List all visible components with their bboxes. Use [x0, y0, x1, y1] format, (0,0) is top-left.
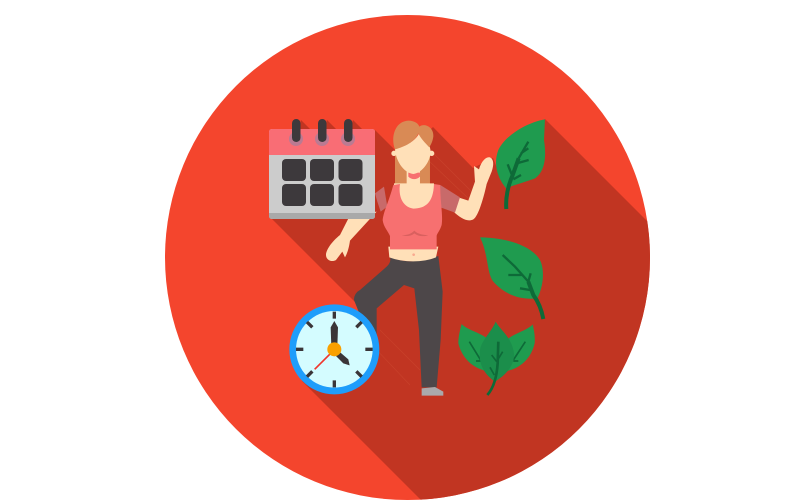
icon: top leaf: [496, 119, 545, 209]
upper body: [326, 121, 493, 261]
long diagonal shadow: [272, 119, 650, 500]
raised leg and trousers: [354, 256, 443, 396]
illustration: [165, 15, 650, 500]
clock ticks: [296, 312, 373, 387]
calendar body: [269, 129, 375, 219]
clock hands: [331, 321, 338, 347]
icon: bottom leaf cluster: [458, 322, 535, 395]
calendar header: [269, 129, 375, 155]
icon: calendar: [269, 119, 375, 219]
woman figure: [326, 121, 493, 396]
icon: clock: [289, 304, 379, 394]
red circle background: [165, 15, 650, 500]
calendar binding rings: [289, 119, 355, 146]
clock centre: [327, 342, 341, 356]
calendar date cells: [282, 159, 362, 206]
icon: middle leaf: [480, 237, 543, 319]
